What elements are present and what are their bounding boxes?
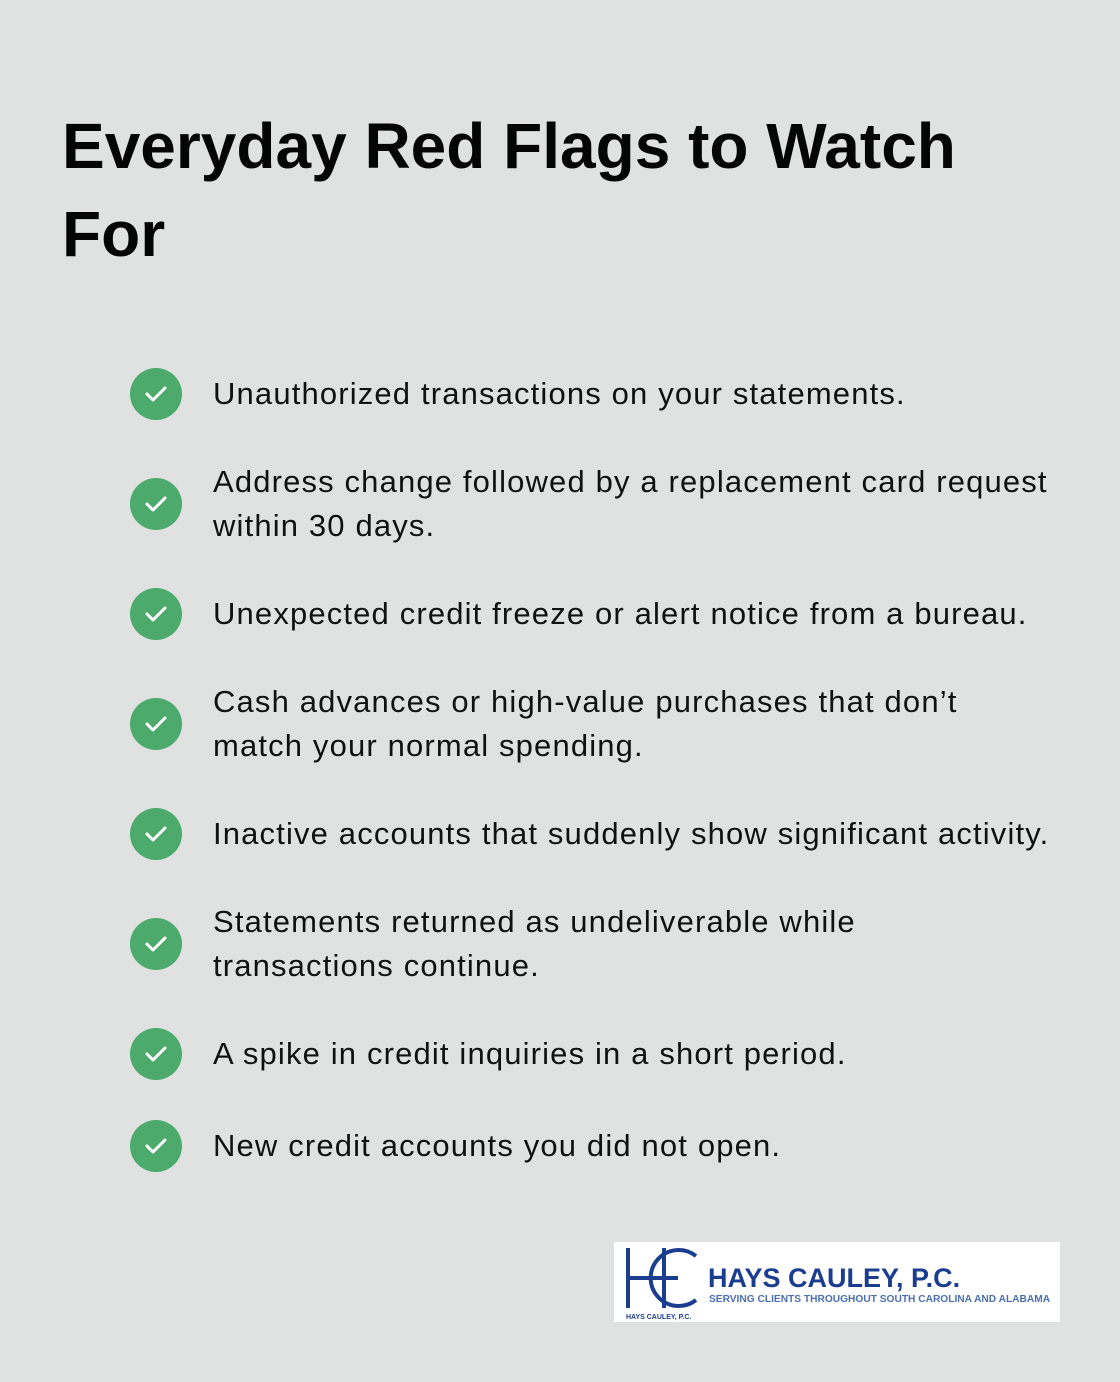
item 1 xyxy=(130,368,906,420)
icon: HC monogram xyxy=(628,1248,696,1308)
logo: SERVING CLIENTS THROUGHOUT SOUTH CAROLINA AND ALABAMA xyxy=(709,1294,1051,1305)
item 5 xyxy=(130,808,1049,860)
item 4: match your normal spending. xyxy=(213,728,644,763)
title: Everyday Red Flags to Watch xyxy=(62,110,956,182)
title xyxy=(62,110,956,270)
item 3: Unexpected credit freeze or alert notice from a bureau. xyxy=(213,596,1028,631)
logo: HAYS CAULEY, P.C. xyxy=(708,1263,960,1293)
item 3 xyxy=(130,588,1028,640)
item 2: within 30 days. xyxy=(213,508,435,543)
title: For xyxy=(62,198,165,270)
item 1: Unauthorized transactions on your statements. xyxy=(213,376,906,411)
item 7 xyxy=(130,1028,847,1080)
item 2: Address change followed by a replacement card request xyxy=(213,464,1048,499)
item 5: Inactive accounts that suddenly show significant activity. xyxy=(213,816,1049,851)
logo: HAYS CAULEY, P.C. xyxy=(626,1314,691,1321)
item 6: transactions continue. xyxy=(213,948,540,983)
item 6: Statements returned as undeliverable while xyxy=(213,904,856,939)
item 2 xyxy=(130,464,1048,543)
logo xyxy=(614,1242,1060,1322)
item 8 xyxy=(130,1120,781,1172)
item 6 xyxy=(130,904,856,983)
item 4: Cash advances or high-value purchases that don’t xyxy=(213,684,958,719)
item 7: A spike in credit inquiries in a short period. xyxy=(213,1036,847,1071)
item 4 xyxy=(130,684,958,763)
item 8: New credit accounts you did not open. xyxy=(213,1128,781,1163)
